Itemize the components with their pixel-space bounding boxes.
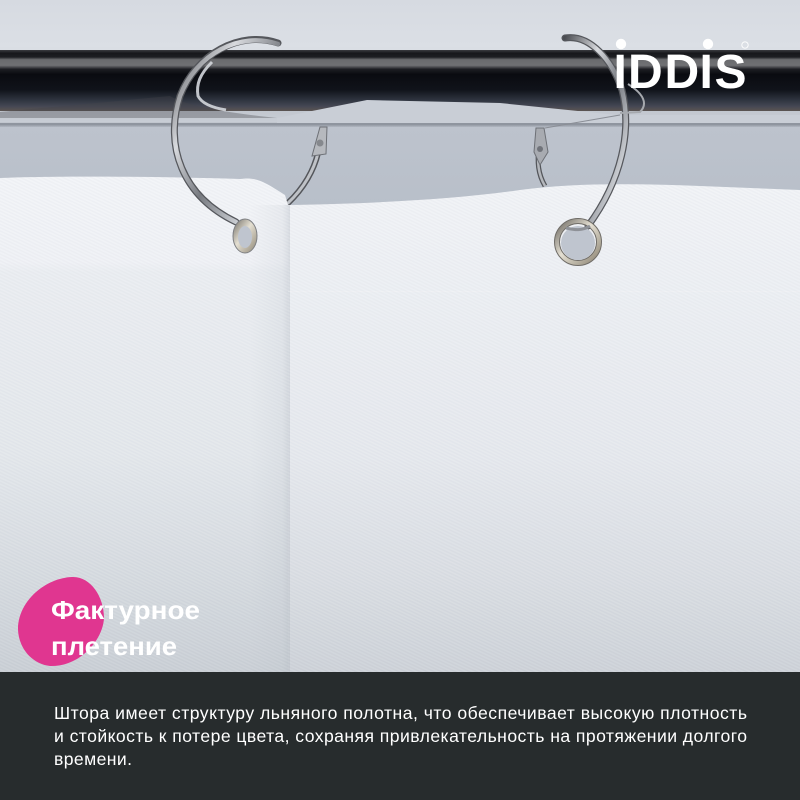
bottom description panel xyxy=(0,672,800,800)
heading: textured weave: плетение xyxy=(51,631,177,661)
heading: textured weave xyxy=(51,595,200,661)
right grommet xyxy=(557,221,599,263)
description text: и стойкость к потере цвета, сохраняя привлекательность на протяжении долгого xyxy=(54,726,747,746)
background wall xyxy=(0,0,800,210)
curtain rod xyxy=(0,50,800,127)
rear ring clasp behind curtain, left xyxy=(288,127,327,203)
description text: времени. xyxy=(54,749,132,769)
heading: textured weave: Фактурное xyxy=(51,595,200,625)
pink blob xyxy=(18,577,104,666)
right curtain ring xyxy=(545,38,644,226)
curtain fabric xyxy=(0,170,800,680)
iddis logo: IDDIS xyxy=(614,46,747,99)
left grommet xyxy=(233,219,257,253)
left curtain ring xyxy=(174,39,278,222)
description text: Штора имеет структуру льняного полотна, что обеспечивает высокую плотность xyxy=(54,703,747,723)
description text xyxy=(54,703,747,769)
rear ring clasp behind curtain, right xyxy=(534,128,548,186)
